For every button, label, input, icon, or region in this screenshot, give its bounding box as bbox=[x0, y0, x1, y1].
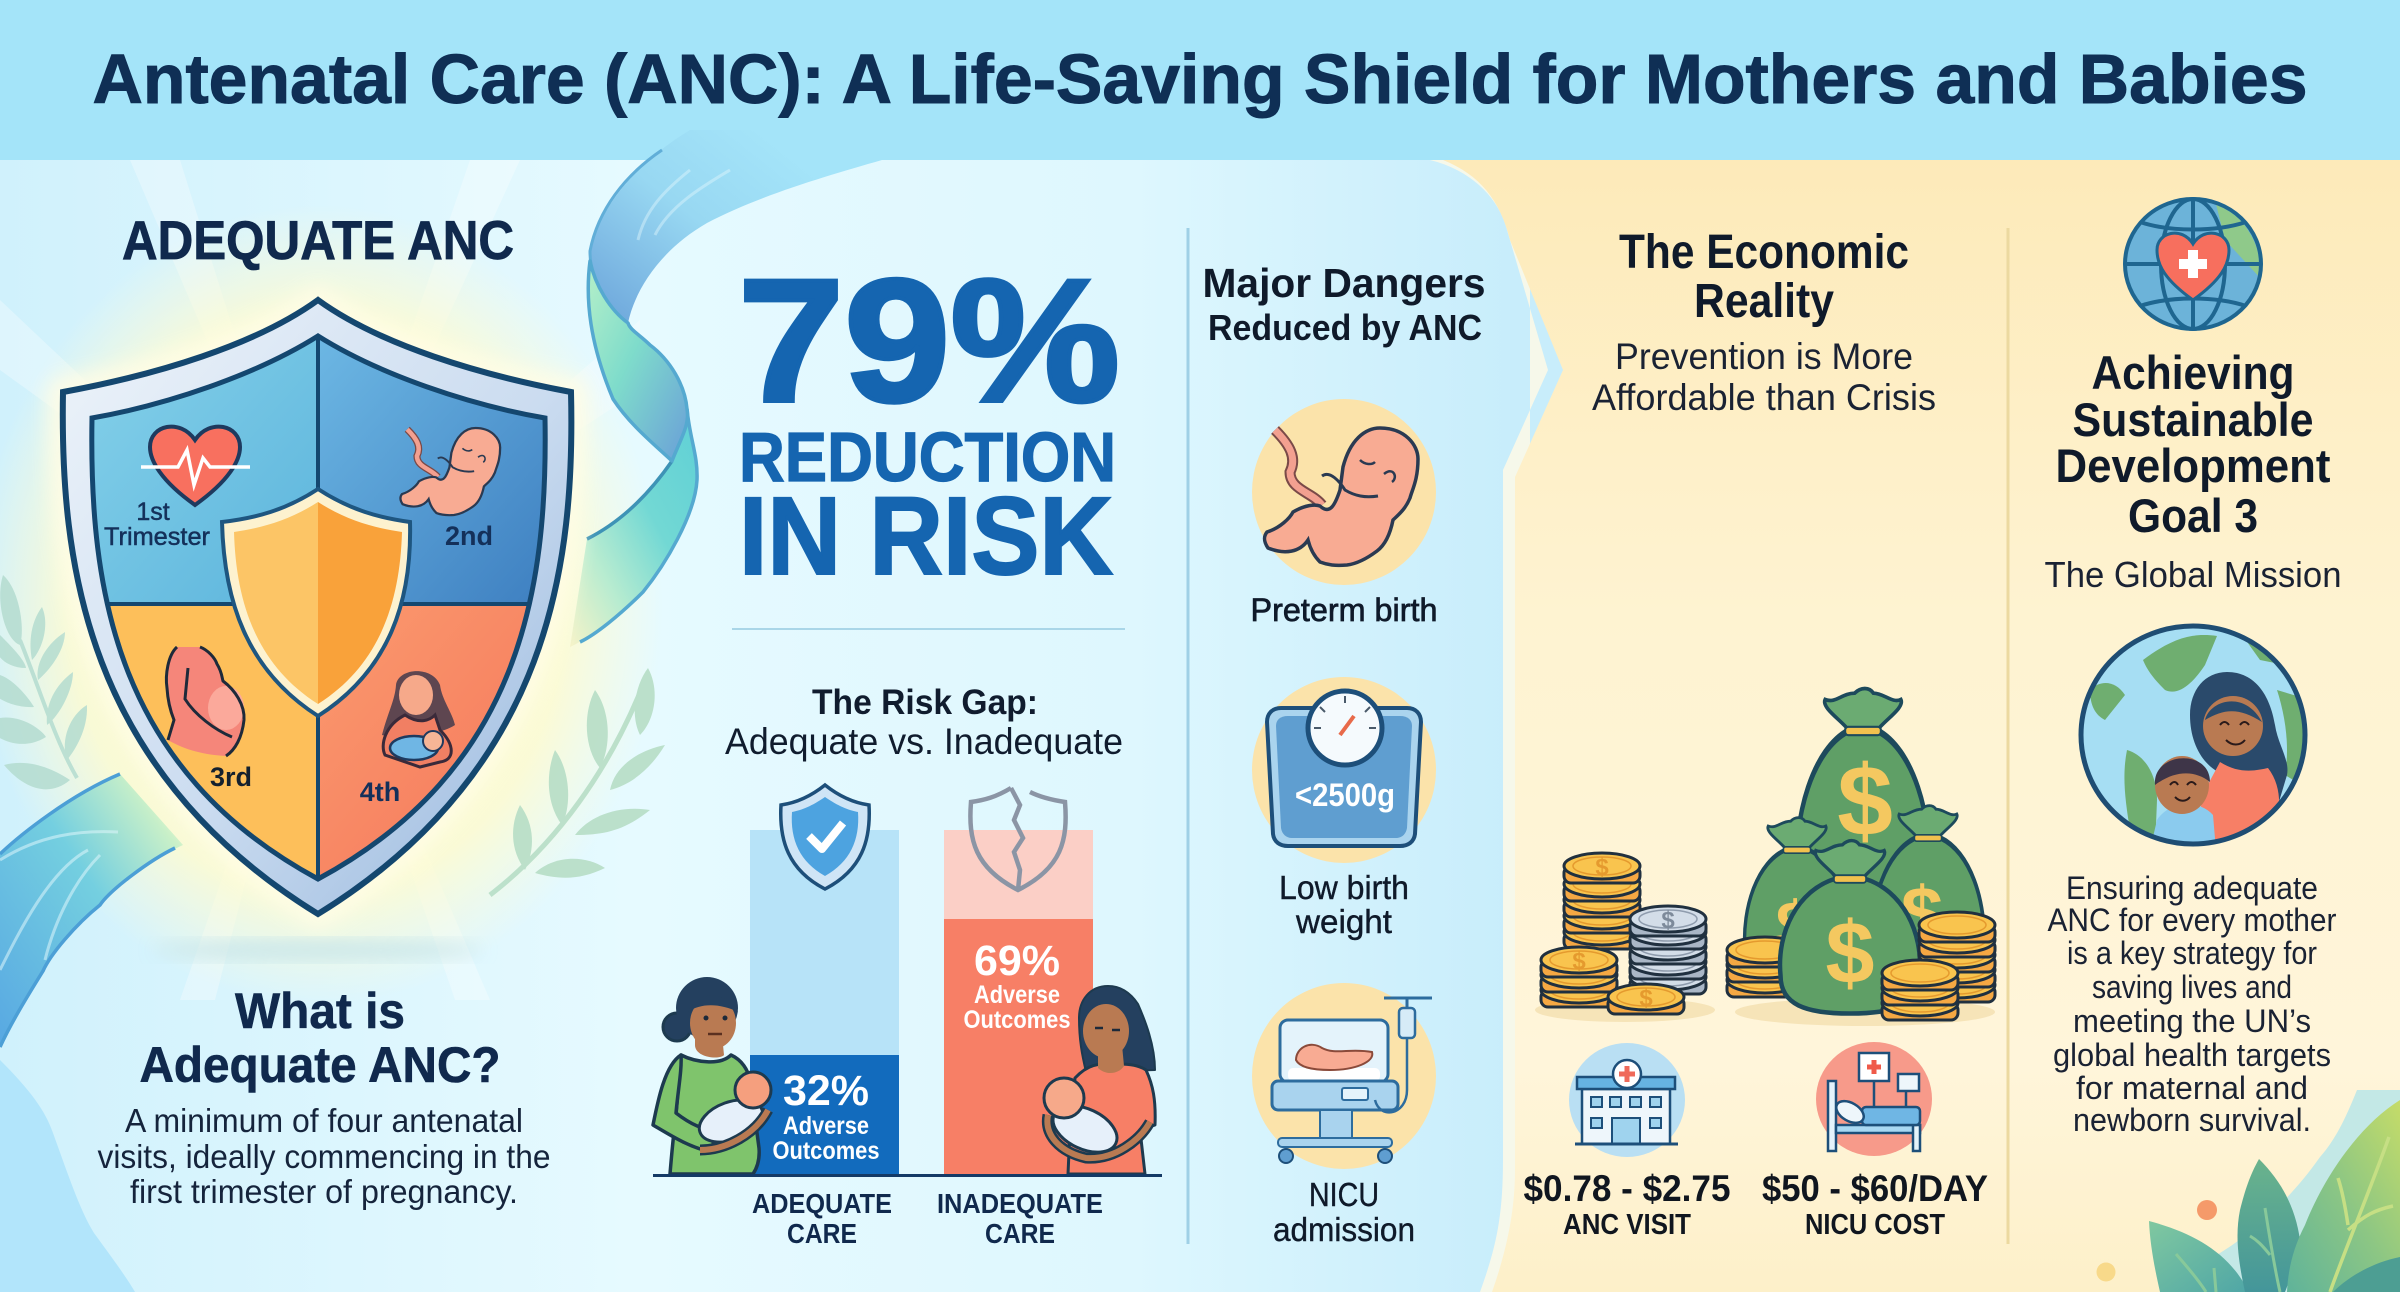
bar: inadequate care 69%: 69% bbox=[974, 937, 1060, 985]
gold stack: $ bbox=[1595, 854, 1609, 881]
ribbon: top swirl bbox=[570, 130, 882, 647]
label: 4th: 4th bbox=[360, 777, 400, 807]
silver stack bbox=[1630, 906, 1706, 994]
front bag bbox=[1780, 841, 1920, 1014]
chart baseline bbox=[653, 1174, 1162, 1177]
text: SDG description: saving lives and bbox=[2092, 969, 2292, 1005]
heading: adequate ANC: ADEQUATE ANC bbox=[122, 209, 514, 271]
heading: what is adequate ANC bbox=[140, 983, 500, 1093]
background: sun rays behind shield bbox=[0, 160, 640, 1000]
bar: adequate care 32%: 32% bbox=[783, 1067, 869, 1115]
figure: mother with baby, inadequate care bbox=[1044, 986, 1155, 1174]
right bag bbox=[1872, 806, 1984, 997]
heading: major dangers bbox=[1202, 260, 1486, 348]
label: Preterm birth bbox=[1250, 592, 1438, 628]
shield: four ANC visits bbox=[63, 300, 571, 914]
label: 1st trimester bbox=[104, 498, 210, 551]
icon: protected shield bbox=[781, 785, 869, 889]
shield rim bbox=[63, 300, 571, 914]
icon: incubator bbox=[1272, 998, 1432, 1163]
background: white strip and yellow right panel bbox=[1430, 160, 2400, 1292]
icon: mother with baby bbox=[382, 671, 455, 767]
heading: the risk gap: Adequate vs. Inadequate bbox=[725, 721, 1123, 762]
icon: pregnant belly bbox=[166, 647, 244, 756]
back bag: $ bbox=[1837, 745, 1893, 857]
left bag bbox=[1744, 818, 1850, 992]
icon: globe with heart bbox=[2125, 199, 2262, 329]
leaves: bottom right bbox=[2096, 1100, 2400, 1292]
front bag: $ bbox=[1826, 903, 1874, 1002]
text: definition: first trimester of pregnancy. bbox=[130, 1173, 518, 1210]
shield shadow bbox=[153, 940, 483, 960]
text: SDG description: meeting the UN’s bbox=[2073, 1003, 2311, 1039]
ribbon: lower left bbox=[0, 774, 183, 1047]
text: definition: visits, ideally commencing in the bbox=[98, 1138, 550, 1175]
bar: inadequate care 69% bbox=[944, 830, 1093, 1175]
icon: hospital bed bbox=[1816, 1042, 1932, 1156]
heading: what is adequate ANC: What is bbox=[235, 983, 405, 1039]
icon: coin stacks bbox=[1535, 853, 1715, 1022]
heading: SDG 3: Goal 3 bbox=[2128, 489, 2258, 542]
shield centre bbox=[222, 489, 410, 716]
text: prevention: Prevention is More bbox=[1615, 336, 1913, 377]
stat: 79% reduction in risk bbox=[738, 244, 1120, 598]
heading: the risk gap bbox=[725, 683, 1123, 762]
stat: ANC visit cost bbox=[1524, 1168, 1730, 1241]
small gold stack bbox=[1541, 947, 1617, 1007]
leaves: right sprig bbox=[490, 668, 665, 895]
label: inadequate care bbox=[937, 1188, 1103, 1249]
text: SDG description: Ensuring adequate bbox=[2066, 870, 2318, 906]
text: SDG description: ANC for every mother bbox=[2048, 902, 2337, 938]
label: inadequate care: INADEQUATE bbox=[937, 1188, 1103, 1219]
leaves: left sprig bbox=[0, 575, 87, 789]
silver stack: $ bbox=[1661, 907, 1675, 934]
stat: NICU cost bbox=[1762, 1168, 1988, 1241]
header band bbox=[0, 0, 2400, 160]
heading: the risk gap: The Risk Gap: bbox=[812, 683, 1038, 722]
icon: weighing scale bbox=[1267, 691, 1421, 846]
text: SDG description: for maternal and bbox=[2076, 1070, 2308, 1106]
stat: 79% reduction in risk: REDUCTION bbox=[739, 418, 1116, 496]
shield quadrants bbox=[80, 330, 558, 884]
item: NICU admission bbox=[1252, 983, 1436, 1248]
text: prevention bbox=[1592, 336, 1936, 418]
figure: mother with baby, adequate care bbox=[653, 977, 771, 1174]
stat: ANC visit cost: $0.78 - $2.75 bbox=[1524, 1168, 1730, 1209]
text: SDG description: global health targets bbox=[2053, 1037, 2331, 1073]
left coins bbox=[1727, 937, 1803, 997]
heading: the economic reality bbox=[1619, 226, 1909, 328]
single coin: $ bbox=[1639, 985, 1653, 1012]
icon: weighing scale: <2500g bbox=[1295, 777, 1395, 813]
heading: SDG 3: Development bbox=[2056, 439, 2331, 492]
background: shield glow bbox=[0, 205, 663, 1005]
front coins bbox=[1882, 960, 1958, 1020]
heading: the economic reality: The Economic bbox=[1619, 226, 1909, 279]
small gold stack: $ bbox=[1572, 948, 1586, 975]
bar: adequate care 32%: Adverse bbox=[783, 1112, 869, 1140]
label: adequate care: CARE bbox=[787, 1218, 857, 1249]
heading: the economic reality: Reality bbox=[1694, 275, 1834, 328]
heading: SDG 3 bbox=[2056, 346, 2331, 542]
label bbox=[1279, 869, 1409, 940]
icon: earth with mother and child bbox=[2081, 626, 2310, 850]
stat: 79% reduction in risk: IN RISK bbox=[739, 475, 1113, 598]
label: 3rd: 3rd bbox=[210, 762, 252, 792]
text: definition: A minimum of four antenatal bbox=[125, 1102, 523, 1139]
title: Antenatal Care (ANC): A Life-Saving Shield for Mothers and Babies bbox=[92, 40, 2308, 118]
right bag: $ bbox=[1901, 872, 1943, 957]
label: adequate care: ADEQUATE bbox=[752, 1188, 892, 1219]
label bbox=[1273, 1176, 1415, 1248]
icon: heart with pulse bbox=[141, 427, 250, 505]
background: lower left blob bbox=[0, 1060, 135, 1292]
back bag bbox=[1796, 688, 1930, 943]
icon: fetus bbox=[400, 428, 500, 515]
shield halo bbox=[63, 300, 571, 914]
background: pale wave bottom right bbox=[2160, 1090, 2400, 1292]
gold stack bbox=[1564, 853, 1640, 949]
item: low birth weight bbox=[1252, 677, 1436, 940]
heading: SDG 3: Achieving bbox=[2092, 346, 2294, 399]
item: preterm birth bbox=[1250, 399, 1438, 628]
stat: ANC visit cost: ANC VISIT bbox=[1563, 1209, 1691, 1241]
stat: NICU cost: $50 - $60/DAY bbox=[1762, 1168, 1988, 1209]
label: NICU bbox=[1309, 1176, 1379, 1213]
text: the global mission: The Global Mission bbox=[2044, 554, 2342, 595]
label: admission bbox=[1273, 1211, 1415, 1248]
stat: 79% reduction in risk: 79% bbox=[738, 244, 1120, 439]
bar: adequate care 32%: Outcomes bbox=[772, 1137, 880, 1165]
icon: hospital bbox=[1569, 1043, 1685, 1157]
right coins bbox=[1919, 912, 1995, 1002]
label: weight bbox=[1295, 903, 1392, 940]
bar: inadequate care 69%: Adverse bbox=[974, 981, 1060, 1009]
bar chart: risk gap bbox=[653, 785, 1162, 1249]
label: Low birth bbox=[1279, 869, 1409, 906]
icon: broken shield bbox=[970, 788, 1066, 890]
bar: inadequate care 69%: Outcomes bbox=[964, 1006, 1070, 1034]
label: adequate care bbox=[752, 1188, 892, 1249]
label: inadequate care: CARE bbox=[985, 1218, 1055, 1249]
text: definition bbox=[98, 1102, 550, 1210]
left bag: $ bbox=[1776, 887, 1814, 965]
heading: SDG 3: Sustainable bbox=[2072, 393, 2314, 446]
label: 1st trimester: 1st bbox=[136, 498, 170, 526]
heading: major dangers: Major Dangers bbox=[1202, 260, 1486, 306]
icon: fetus bbox=[1264, 428, 1418, 565]
icon: money bags bbox=[1727, 688, 1995, 1026]
text: prevention: Affordable than Crisis bbox=[1592, 377, 1936, 418]
heading: what is adequate ANC: Adequate ANC? bbox=[140, 1037, 500, 1093]
stat: NICU cost: NICU COST bbox=[1805, 1209, 1945, 1241]
text: SDG description: newborn survival. bbox=[2073, 1102, 2311, 1138]
bar: adequate care 32% bbox=[750, 830, 899, 1175]
text: SDG description bbox=[2048, 870, 2337, 1138]
text: SDG description: is a key strategy for bbox=[2067, 935, 2317, 971]
heading: major dangers: Reduced by ANC bbox=[1208, 307, 1482, 348]
single coin bbox=[1608, 984, 1684, 1014]
label: 2nd: 2nd bbox=[445, 521, 493, 551]
label: 1st trimester: Trimester bbox=[104, 523, 210, 551]
